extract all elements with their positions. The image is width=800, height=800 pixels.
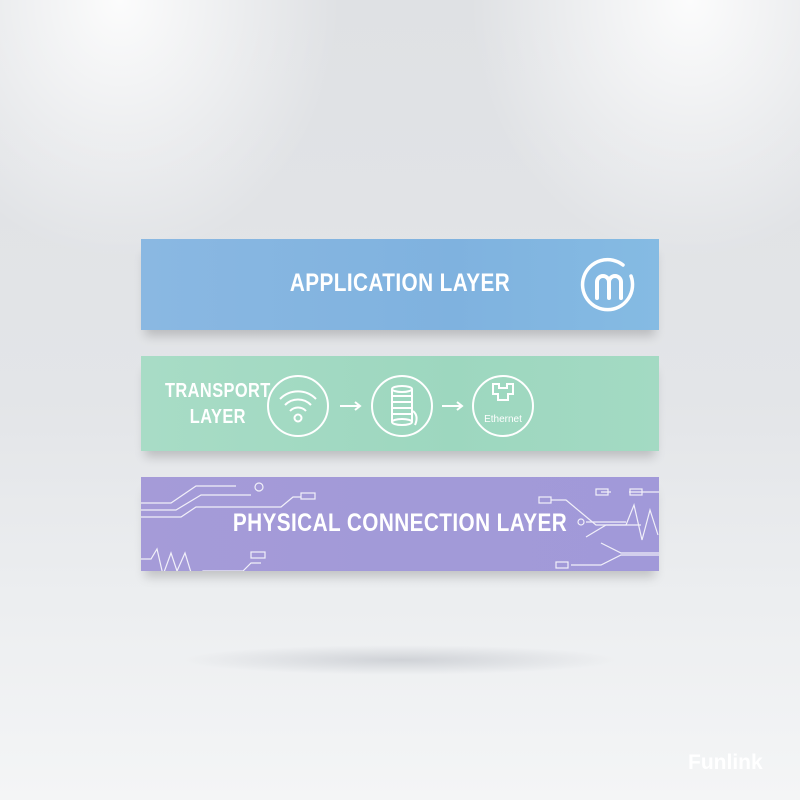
panel: physical connection layer: [141, 477, 659, 571]
heading: transport layer: TRANSPORT: [165, 380, 271, 402]
icons: transport flow: [267, 375, 534, 437]
panel: application layer: [141, 239, 659, 330]
floor shadow: [180, 645, 620, 675]
panel: transport layer: [141, 356, 659, 451]
heading: application layer: APPLICATION LAYER: [290, 269, 510, 297]
heading: transport layer: LAYER: [190, 406, 246, 428]
icon: m logo: [580, 258, 634, 312]
brand logo: Funlink: [688, 751, 763, 774]
icons: transport flow: Ethernet: [484, 414, 522, 425]
circuit decoration: [141, 482, 659, 571]
heading: physical connection layer: PHYSICAL CONNECTION LAYER: [233, 509, 567, 537]
heading: transport layer: [165, 380, 271, 428]
